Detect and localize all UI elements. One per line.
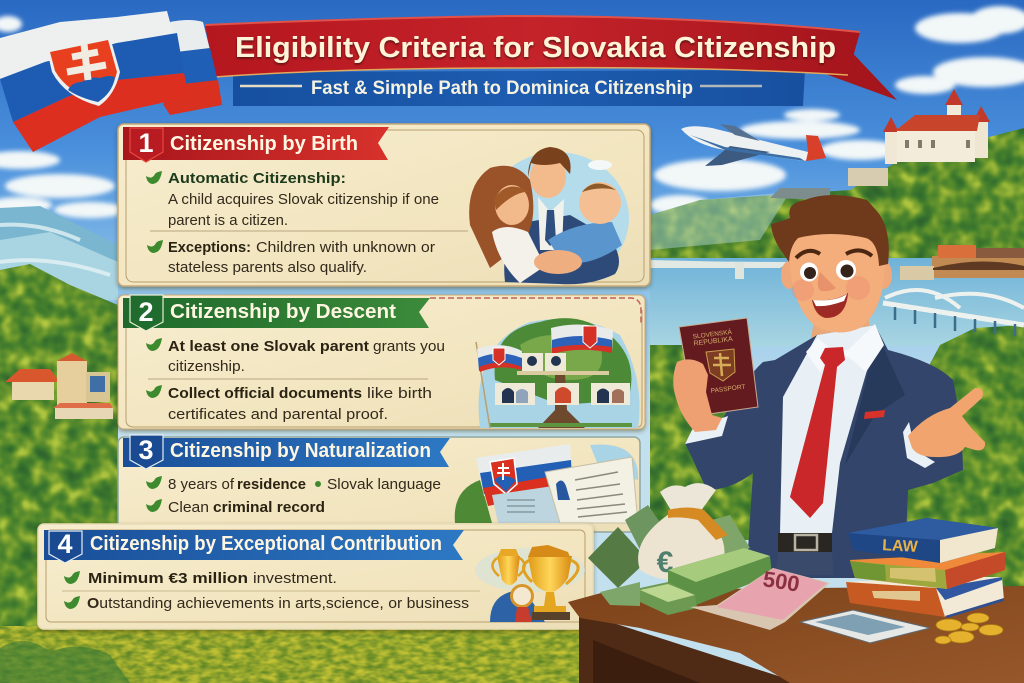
neck: [810, 315, 872, 368]
panel 1: citizenship by birth: [118, 124, 650, 286]
passport: PASSPORT: [710, 384, 746, 395]
mountains: [0, 206, 118, 300]
check icons: [64, 571, 80, 609]
river bridge: [883, 290, 1024, 336]
suit jacket and arms: [685, 325, 963, 578]
head: [771, 195, 892, 333]
text: criminal record: [168, 499, 325, 516]
desk: [568, 586, 1024, 683]
shirt cuffs: [685, 416, 728, 444]
text: residence and language: residence: [237, 476, 306, 493]
ribbon: Citizenship by Naturalization: [170, 440, 431, 462]
family tree illustration: [476, 318, 640, 428]
text: exceptions: stateless parents also qualify.: [168, 259, 367, 276]
shirt: [780, 325, 875, 533]
ribbon: [44, 529, 464, 563]
middle book: [850, 552, 1005, 589]
ribbon: Citizenship by Exceptional Contribution: [90, 533, 442, 555]
text: automatic citizenship: [168, 170, 439, 229]
text: slovak parent: citizenship.: [168, 358, 245, 375]
header banner: [205, 16, 897, 106]
500 note: [690, 566, 830, 630]
pocket square: [864, 410, 885, 419]
hand holding passport: [673, 359, 722, 432]
desk front: [579, 612, 800, 683]
ribbon: 3: [138, 435, 154, 465]
panel card: [118, 437, 640, 532]
documents illustration: [455, 444, 638, 523]
text: slovak parent: At least one Slovak parent: [168, 338, 369, 355]
bottom meadow: [0, 626, 600, 683]
law books: [846, 518, 1005, 618]
belt: [778, 533, 832, 552]
ribbon: 1: [138, 128, 154, 158]
right buildings: [900, 245, 1024, 280]
castle: [848, 89, 990, 186]
check icons: [146, 171, 163, 253]
lapels: [845, 340, 905, 465]
flag coat of arms: [47, 37, 120, 106]
text: minimum investment: [88, 570, 337, 587]
loose bills: [588, 527, 648, 588]
text: residence and language: Slovak language: [327, 476, 441, 493]
panel 4: citizenship by exceptional contribution: [38, 524, 593, 629]
right hills: [650, 128, 1024, 340]
500 note: 500: [761, 566, 801, 597]
cash stacks: [668, 548, 772, 605]
money bag: €: [657, 546, 674, 579]
text: exceptions: Exceptions:: [168, 239, 251, 256]
panel card: [118, 124, 650, 286]
text: exceptions: [168, 239, 435, 276]
money bag: [638, 483, 728, 580]
text: automatic citizenship: parent is a citizen.: [168, 212, 288, 229]
text: outstanding achievements: Outstanding achievements in arts,science, or business: [87, 595, 469, 612]
top LAW book: [848, 518, 998, 563]
hair: [771, 195, 889, 266]
text: criminal record: criminal record: [213, 499, 325, 516]
text: official documents: [168, 385, 432, 423]
river: [650, 258, 1024, 348]
subtitle ribbon: Fast & Simple Path to Dominica Citizenship: [311, 78, 693, 99]
ribbon: [123, 435, 450, 469]
trophies illustration: [475, 545, 585, 622]
banner right tail: [820, 45, 897, 100]
left village: [5, 353, 113, 419]
bottom book: [846, 577, 1004, 618]
clouds: [0, 6, 1024, 218]
passport: REPUBLIKA: [693, 336, 733, 348]
ribbon: 4: [57, 529, 73, 559]
open hand: [908, 388, 985, 457]
eyebrows: [796, 250, 872, 258]
panel 3: citizenship by naturalization: [118, 435, 640, 532]
text: exceptions: Children with unknown or: [256, 239, 435, 256]
check icons: [146, 476, 162, 512]
ribbon: Citizenship by Descent: [170, 301, 396, 323]
desk top: [568, 586, 1024, 683]
text: minimum investment: Minimum €3 million: [88, 570, 248, 587]
money pile: [588, 483, 830, 630]
ribbon: 2: [138, 297, 154, 327]
panel card: [118, 295, 645, 429]
text: slovak parent: [168, 338, 445, 375]
icon: airplane: [681, 124, 826, 166]
text: residence and language: 8 years of: [168, 476, 235, 493]
man with passport: [673, 195, 985, 578]
left foliage: [0, 264, 118, 640]
smile: [812, 293, 848, 318]
title ribbon: [205, 16, 860, 77]
text: official documents: certificates and parental proof.: [168, 406, 388, 423]
text: official documents: like birth: [367, 385, 432, 402]
ribbon: [123, 127, 389, 162]
check icons: [146, 338, 162, 398]
flag back fold: [163, 20, 222, 115]
panel 2: citizenship by descent: [118, 295, 645, 429]
ribbon: [123, 295, 430, 331]
text: minimum investment: investment.: [253, 570, 337, 587]
text: criminal record: Clean: [168, 499, 209, 516]
subtitle ribbon: [233, 70, 805, 106]
text: residence and language: [168, 476, 441, 493]
text: automatic citizenship: Automatic Citizenship:: [168, 170, 346, 187]
family illustration: [469, 147, 629, 284]
calculator: [800, 610, 930, 643]
text: slovak parent: grants you: [373, 338, 445, 355]
gold coins: [935, 613, 1003, 644]
passport: [679, 318, 758, 416]
panel card: [38, 524, 593, 629]
title ribbon: Eligibility Criteria for Slovakia Citizenship: [235, 32, 836, 64]
right lower foliage: [650, 345, 760, 540]
top LAW book: LAW: [882, 537, 919, 556]
ribbon: Citizenship by Birth: [170, 133, 358, 155]
flag main: [0, 11, 189, 152]
text: automatic citizenship: A child acquires Slovak citizenship if one: [168, 191, 439, 208]
eyes: [800, 260, 856, 282]
passport: SLOVENSKÁ: [692, 327, 733, 341]
tie: [790, 347, 845, 518]
text: official documents: Collect official documents: [168, 385, 362, 402]
Slovak flag: [0, 11, 222, 152]
